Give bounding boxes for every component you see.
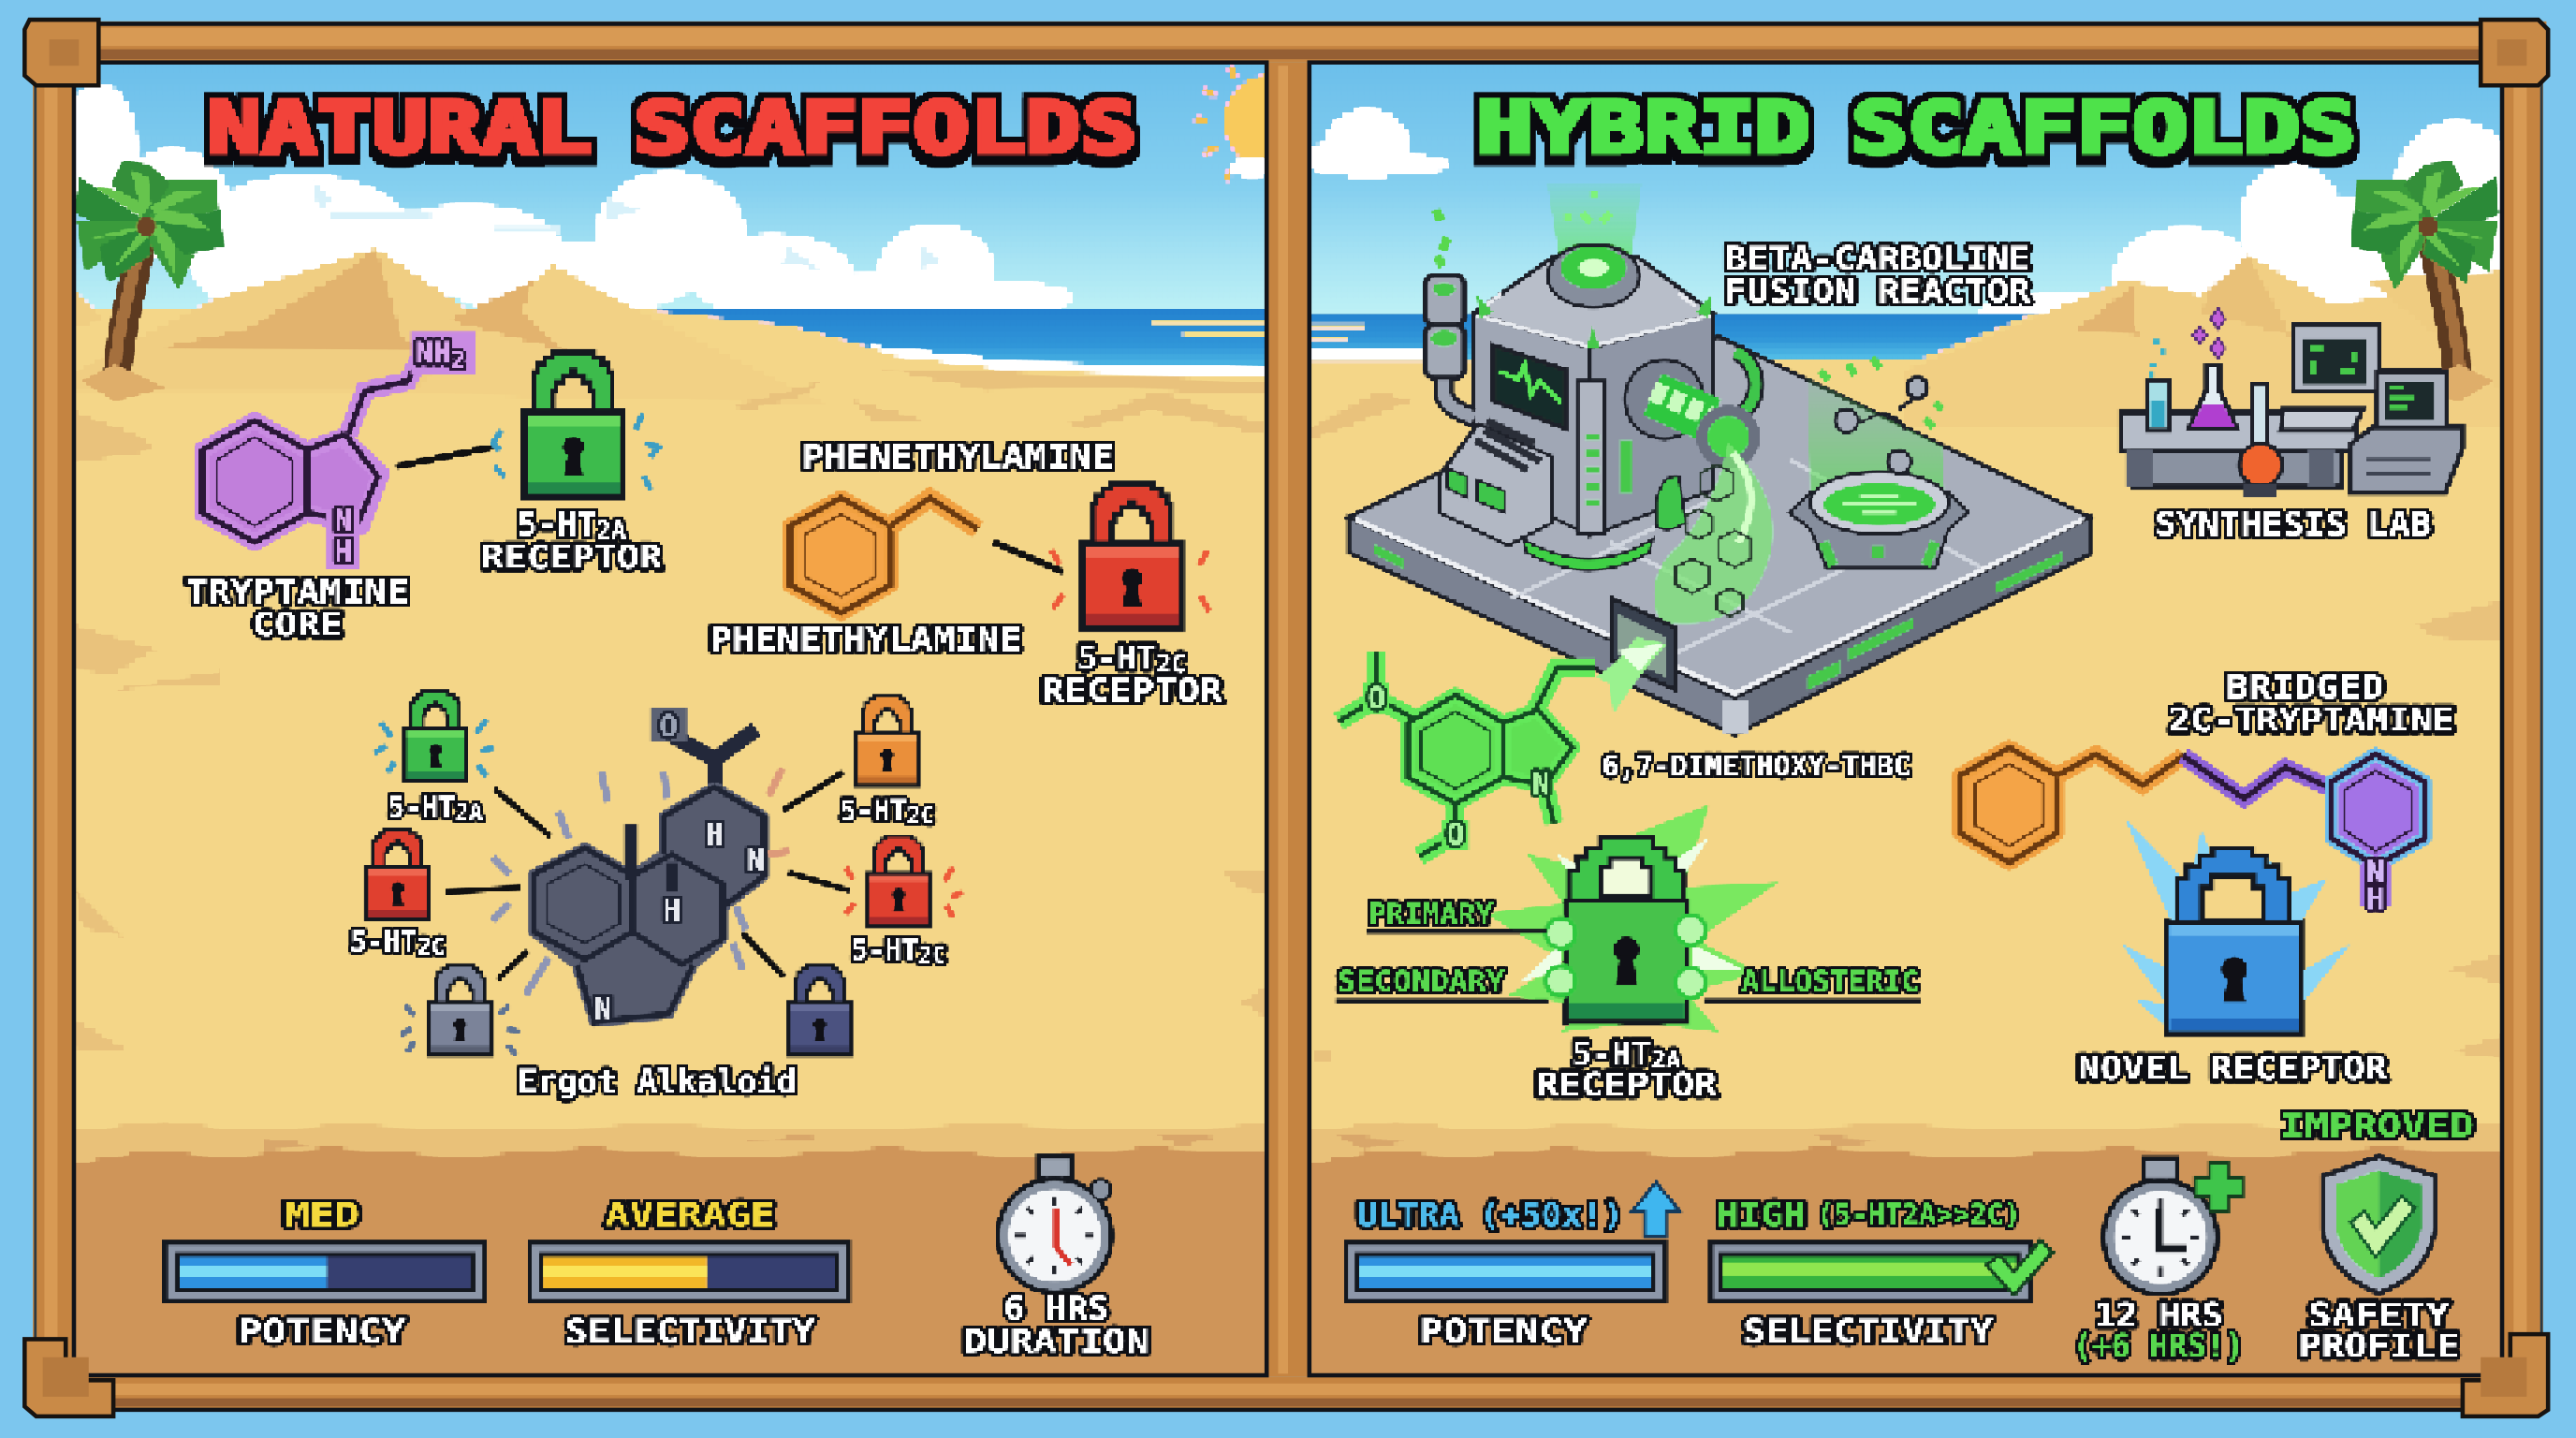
- label: average: AVERAGE: [606, 1196, 775, 1234]
- label: potency: POTENCY: [238, 1313, 406, 1351]
- small receptor labels: 2C: [417, 933, 445, 961]
- label: safety profile: SAFETY: [2308, 1296, 2450, 1334]
- label: novel receptor: NOVEL RECEPTOR: [2078, 1049, 2388, 1088]
- label: tryptamine core: [185, 573, 409, 644]
- icon: small navy lock: [787, 972, 853, 1057]
- tower accents: [1586, 433, 1632, 506]
- tryptamine molecule: [202, 332, 476, 568]
- sand marks: [1310, 391, 2502, 1157]
- label: 6,7-dimethoxy-THBC: 6,7-DIMETHOXY-THBC: [1602, 750, 1910, 783]
- left scene objects: [76, 161, 1209, 1303]
- right labels: [1338, 240, 2474, 1366]
- icon: small green lock: [374, 697, 493, 783]
- small receptor labels: 2C: [918, 941, 946, 968]
- title: hybrid scaffolds: HYBRID: [1477, 87, 1810, 169]
- potency meter: [163, 1240, 487, 1303]
- title: natural scaffolds: SCAFFOLDS: [634, 87, 1137, 169]
- right scene backdrop: [1305, 63, 2522, 1375]
- icon: small red lock right: [846, 842, 962, 927]
- ergot connectors: [446, 772, 849, 979]
- label: 5-HT2A receptor: 5-HT: [518, 506, 596, 544]
- icon: check mark: [1986, 1240, 2052, 1295]
- atom labels: O: [1368, 682, 1385, 715]
- dunes: [1906, 255, 2502, 427]
- label: beta-carboline fusion reactor: [1725, 240, 2031, 311]
- label: 5-HT2C receptor: 2C: [1157, 651, 1186, 679]
- label: synthesis lab: SYNTHESIS LAB: [2156, 506, 2432, 544]
- label: duration: 6 HRS: [1003, 1289, 1109, 1328]
- label: ultra: ULTRA (+50x!): [1357, 1196, 1623, 1234]
- purple flask: [2188, 365, 2237, 429]
- icon: small red lock left: [365, 835, 431, 920]
- label: 5-HT2A receptor: 2A: [596, 518, 626, 546]
- small receptor labels: 5-HT: [851, 934, 918, 967]
- icon: safety shield: [2323, 1157, 2435, 1293]
- label: selectivity: SELECTIVITY: [1743, 1313, 1993, 1351]
- atom labels: N: [594, 992, 612, 1026]
- atom labels: N: [334, 505, 352, 538]
- sand: [1310, 312, 2502, 1167]
- icon: sun: [1193, 65, 1265, 183]
- output door: [1612, 598, 1676, 690]
- main computer: [2280, 326, 2378, 431]
- second computer: [2378, 372, 2446, 431]
- reactor platform: [1349, 337, 2089, 735]
- label: safety profile: PROFILE: [2298, 1328, 2459, 1366]
- dunes: [76, 247, 635, 350]
- lab cabinet: [2351, 427, 2463, 493]
- top emission beam: [1547, 184, 1641, 263]
- atom labels: H: [2366, 883, 2384, 917]
- title: natural scaffolds: [207, 87, 1137, 169]
- label: selectivity: SELECTIVITY: [565, 1313, 815, 1351]
- ocean: [652, 311, 1266, 376]
- reactor base ring: [1523, 539, 1653, 570]
- label: tryptamine core: CORE: [252, 606, 343, 644]
- label: beta-carboline fusion reactor: BETA-CARBOLINE: [1725, 240, 2030, 278]
- label: tryptamine core: TRYPTAMINE: [185, 573, 409, 611]
- label: high selectivity: (5-HT2A>>2C): [1817, 1199, 2021, 1232]
- reactor tower: [1473, 258, 1714, 536]
- label: phenethylamine bottom: PHENETHYLAMINE: [710, 621, 1022, 659]
- atom labels: O: [1447, 818, 1465, 852]
- label: secondary: SECONDARY: [1338, 965, 1505, 998]
- small receptor labels: 2C: [907, 801, 934, 829]
- atom labels: O: [660, 710, 678, 743]
- title: hybrid scaffolds: SCAFFOLDS: [1852, 87, 2356, 169]
- atom labels: [1368, 682, 2384, 917]
- right scene objects: [1336, 161, 2499, 1303]
- label: 5-HT2A receptor: [481, 506, 663, 577]
- icon: stopwatch: [996, 1157, 1114, 1295]
- label: 12 hrs: [2073, 1296, 2244, 1366]
- label: bridged 2C-tryptamine: [2169, 668, 2454, 740]
- label: duration: DURATION: [963, 1322, 1149, 1360]
- test tube: [2147, 381, 2169, 431]
- connector: tryptamine to 5-HT2A: [396, 447, 493, 466]
- label: 12 hrs: (+6 HRS!): [2073, 1328, 2244, 1366]
- icon: palm tree: [76, 161, 224, 401]
- panel: natural scaffolds: [59, 63, 1319, 1375]
- small receptor labels: 5-HT: [350, 926, 417, 959]
- clouds: [1305, 109, 2522, 332]
- small receptor labels: [350, 791, 946, 968]
- selectivity meter: [527, 1240, 851, 1303]
- molecular stream: [1654, 444, 1773, 624]
- icon: blue lock novel receptor: [2123, 820, 2349, 1034]
- 6,7-dimethoxy-THBC molecule: [1339, 638, 1666, 856]
- connector: phenethylamine to 5-HT2C: [994, 542, 1063, 572]
- control console: [1439, 420, 1553, 546]
- phenethylamine molecule: [790, 498, 977, 613]
- icon: small orange lock: [855, 702, 920, 787]
- icon: green lock with binding sites: [1336, 805, 1921, 1032]
- label: allosteric: ALLOSTERIC: [1741, 965, 1919, 998]
- panel: hybrid scaffolds: [1305, 63, 2522, 1375]
- label: 5-HT2C receptor: 5-HT: [1077, 638, 1157, 677]
- label: phenethylamine top: PHENETHYLAMINE: [801, 438, 1114, 477]
- label: 5-HT2A receptor: RECEPTOR: [1536, 1066, 1718, 1105]
- label: high selectivity: [1717, 1196, 2021, 1234]
- label: potency: POTENCY: [1419, 1313, 1587, 1351]
- ground band: [1310, 1121, 2502, 1375]
- label: 5-HT2C receptor: RECEPTOR: [1042, 671, 1223, 710]
- reactor screen: [1493, 345, 1566, 429]
- small receptor labels: 2A: [455, 799, 483, 826]
- label: 12 hrs: 12 HRS: [2095, 1296, 2223, 1334]
- label: duration: [963, 1289, 1149, 1360]
- left labels: [185, 337, 1223, 1360]
- label: bridged 2C-tryptamine: BRIDGED: [2226, 668, 2384, 707]
- sand: [74, 309, 1266, 1164]
- icon: red lock 5-HT2C: [1051, 493, 1209, 631]
- left scene backdrop: [59, 63, 1319, 1375]
- ergot alkaloid molecule: [493, 708, 788, 1022]
- label: ergot alkaloid: Ergot Alkaloid: [518, 1063, 797, 1101]
- synthesis lab: [2121, 309, 2463, 496]
- atom labels: [334, 337, 765, 1026]
- atom labels: N: [747, 844, 765, 878]
- atom labels: N: [2366, 856, 2384, 889]
- icon: up arrow: [1633, 1183, 1679, 1236]
- atom labels: 2: [451, 346, 465, 374]
- icon: palm tree: [2351, 161, 2499, 401]
- second reaction pod: [1789, 359, 1969, 568]
- label: med: MED: [285, 1196, 359, 1234]
- label: high selectivity: HIGH: [1717, 1196, 1806, 1234]
- label: improved: IMPROVED: [2280, 1108, 2474, 1146]
- bridged 2C-tryptamine molecule: [1960, 748, 2425, 905]
- icon: small grey lock: [401, 972, 520, 1057]
- atom labels: N: [1532, 768, 1550, 801]
- label: 5-HT2A receptor: 2A: [1651, 1047, 1681, 1075]
- icon: green lock 5-HT2A: [493, 361, 659, 500]
- left coolant pipe: [1426, 211, 1473, 418]
- label: safety profile: [2298, 1296, 2459, 1366]
- atom labels: H: [663, 894, 681, 928]
- atom labels: H: [334, 536, 352, 569]
- selectivity meter full: [1708, 1240, 2032, 1303]
- title: natural scaffolds: NATURAL: [207, 87, 592, 169]
- icon: stopwatch plus: [2101, 1158, 2243, 1297]
- label: bridged 2C-tryptamine: 2C-TRYPTAMINE: [2169, 701, 2454, 740]
- atom labels: NH: [416, 337, 451, 371]
- potency meter full: [1344, 1240, 1667, 1303]
- label: 5-HT2C receptor: [1042, 638, 1223, 710]
- label: primary: PRIMARY: [1368, 898, 1493, 931]
- reactor core dome: [1547, 194, 1640, 307]
- atom labels: H: [706, 818, 724, 852]
- port and glowing tube: [1625, 352, 1756, 529]
- orange flask: [2239, 385, 2282, 496]
- label: 5-HT2A receptor: 5-HT: [1572, 1034, 1651, 1073]
- ground band: [74, 1121, 1266, 1375]
- fusion reactor: [1349, 184, 2089, 735]
- small receptor labels: 5-HT: [840, 795, 907, 828]
- sand marks: [74, 368, 1266, 1051]
- clouds: [59, 82, 1275, 326]
- title: hybrid scaffolds: [1477, 87, 2356, 169]
- label: 5-HT2A receptor: RECEPTOR: [481, 538, 663, 577]
- label: 5-HT2A receptor: [1536, 1034, 1718, 1105]
- ocean: [1310, 312, 2037, 361]
- label: beta-carboline fusion reactor: FUSION REACTOR: [1725, 272, 2031, 311]
- small receptor labels: 5-HT: [388, 791, 455, 824]
